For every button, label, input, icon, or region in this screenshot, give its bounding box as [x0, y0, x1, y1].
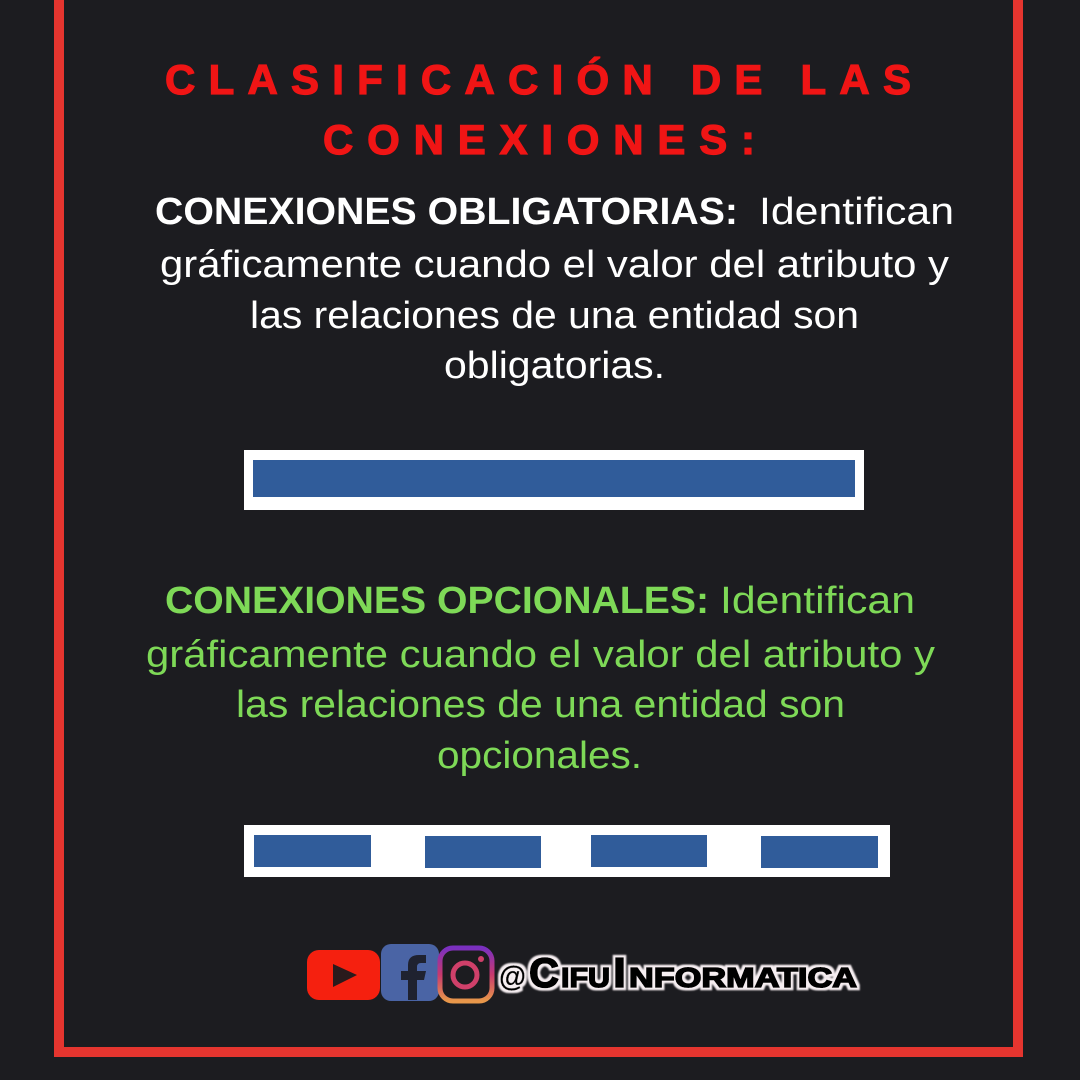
title: CONEXIONES: [323, 116, 755, 163]
text block: conexiones opcionales [146, 580, 935, 777]
handle text: C [529, 949, 559, 996]
icon: youtube [307, 950, 380, 1000]
icon: facebook [381, 944, 439, 1001]
text block: conexiones obligatorias: las relaciones de una entidad son [250, 295, 859, 337]
text block: conexiones obligatorias: gráficamente cuando el valor del atributo y [160, 244, 949, 286]
text block: conexiones obligatorias: obligatorias. [444, 345, 665, 387]
text block: conexiones obligatorias: Identifican [759, 191, 954, 233]
handle text [499, 949, 857, 996]
handle text: I [613, 949, 626, 996]
title [165, 55, 911, 163]
social handle row [307, 944, 857, 1001]
text block: conexiones opcionales: las relaciones de una entidad son [236, 684, 845, 726]
text block: conexiones opcionales: CONEXIONES OPCIONALES: [165, 580, 709, 622]
solid line symbol [244, 450, 864, 510]
text block: conexiones opcionales: Identifican [720, 580, 915, 622]
text block: conexiones obligatorias: CONEXIONES OBLIGATORIAS: [155, 191, 738, 233]
handle text: @ [499, 961, 526, 993]
icon: instagram [440, 948, 492, 1001]
text block: conexiones opcionales: gráficamente cuando el valor del atributo y [146, 634, 935, 676]
text block: conexiones opcionales: opcionales. [437, 735, 642, 777]
dashed line symbol [244, 825, 890, 877]
text block: conexiones obligatorias [155, 191, 954, 387]
handle text: IFU [561, 962, 610, 993]
handle text: NFORMATICA [629, 962, 857, 993]
title: CLASIFICACIÓN DE LAS [165, 55, 911, 103]
